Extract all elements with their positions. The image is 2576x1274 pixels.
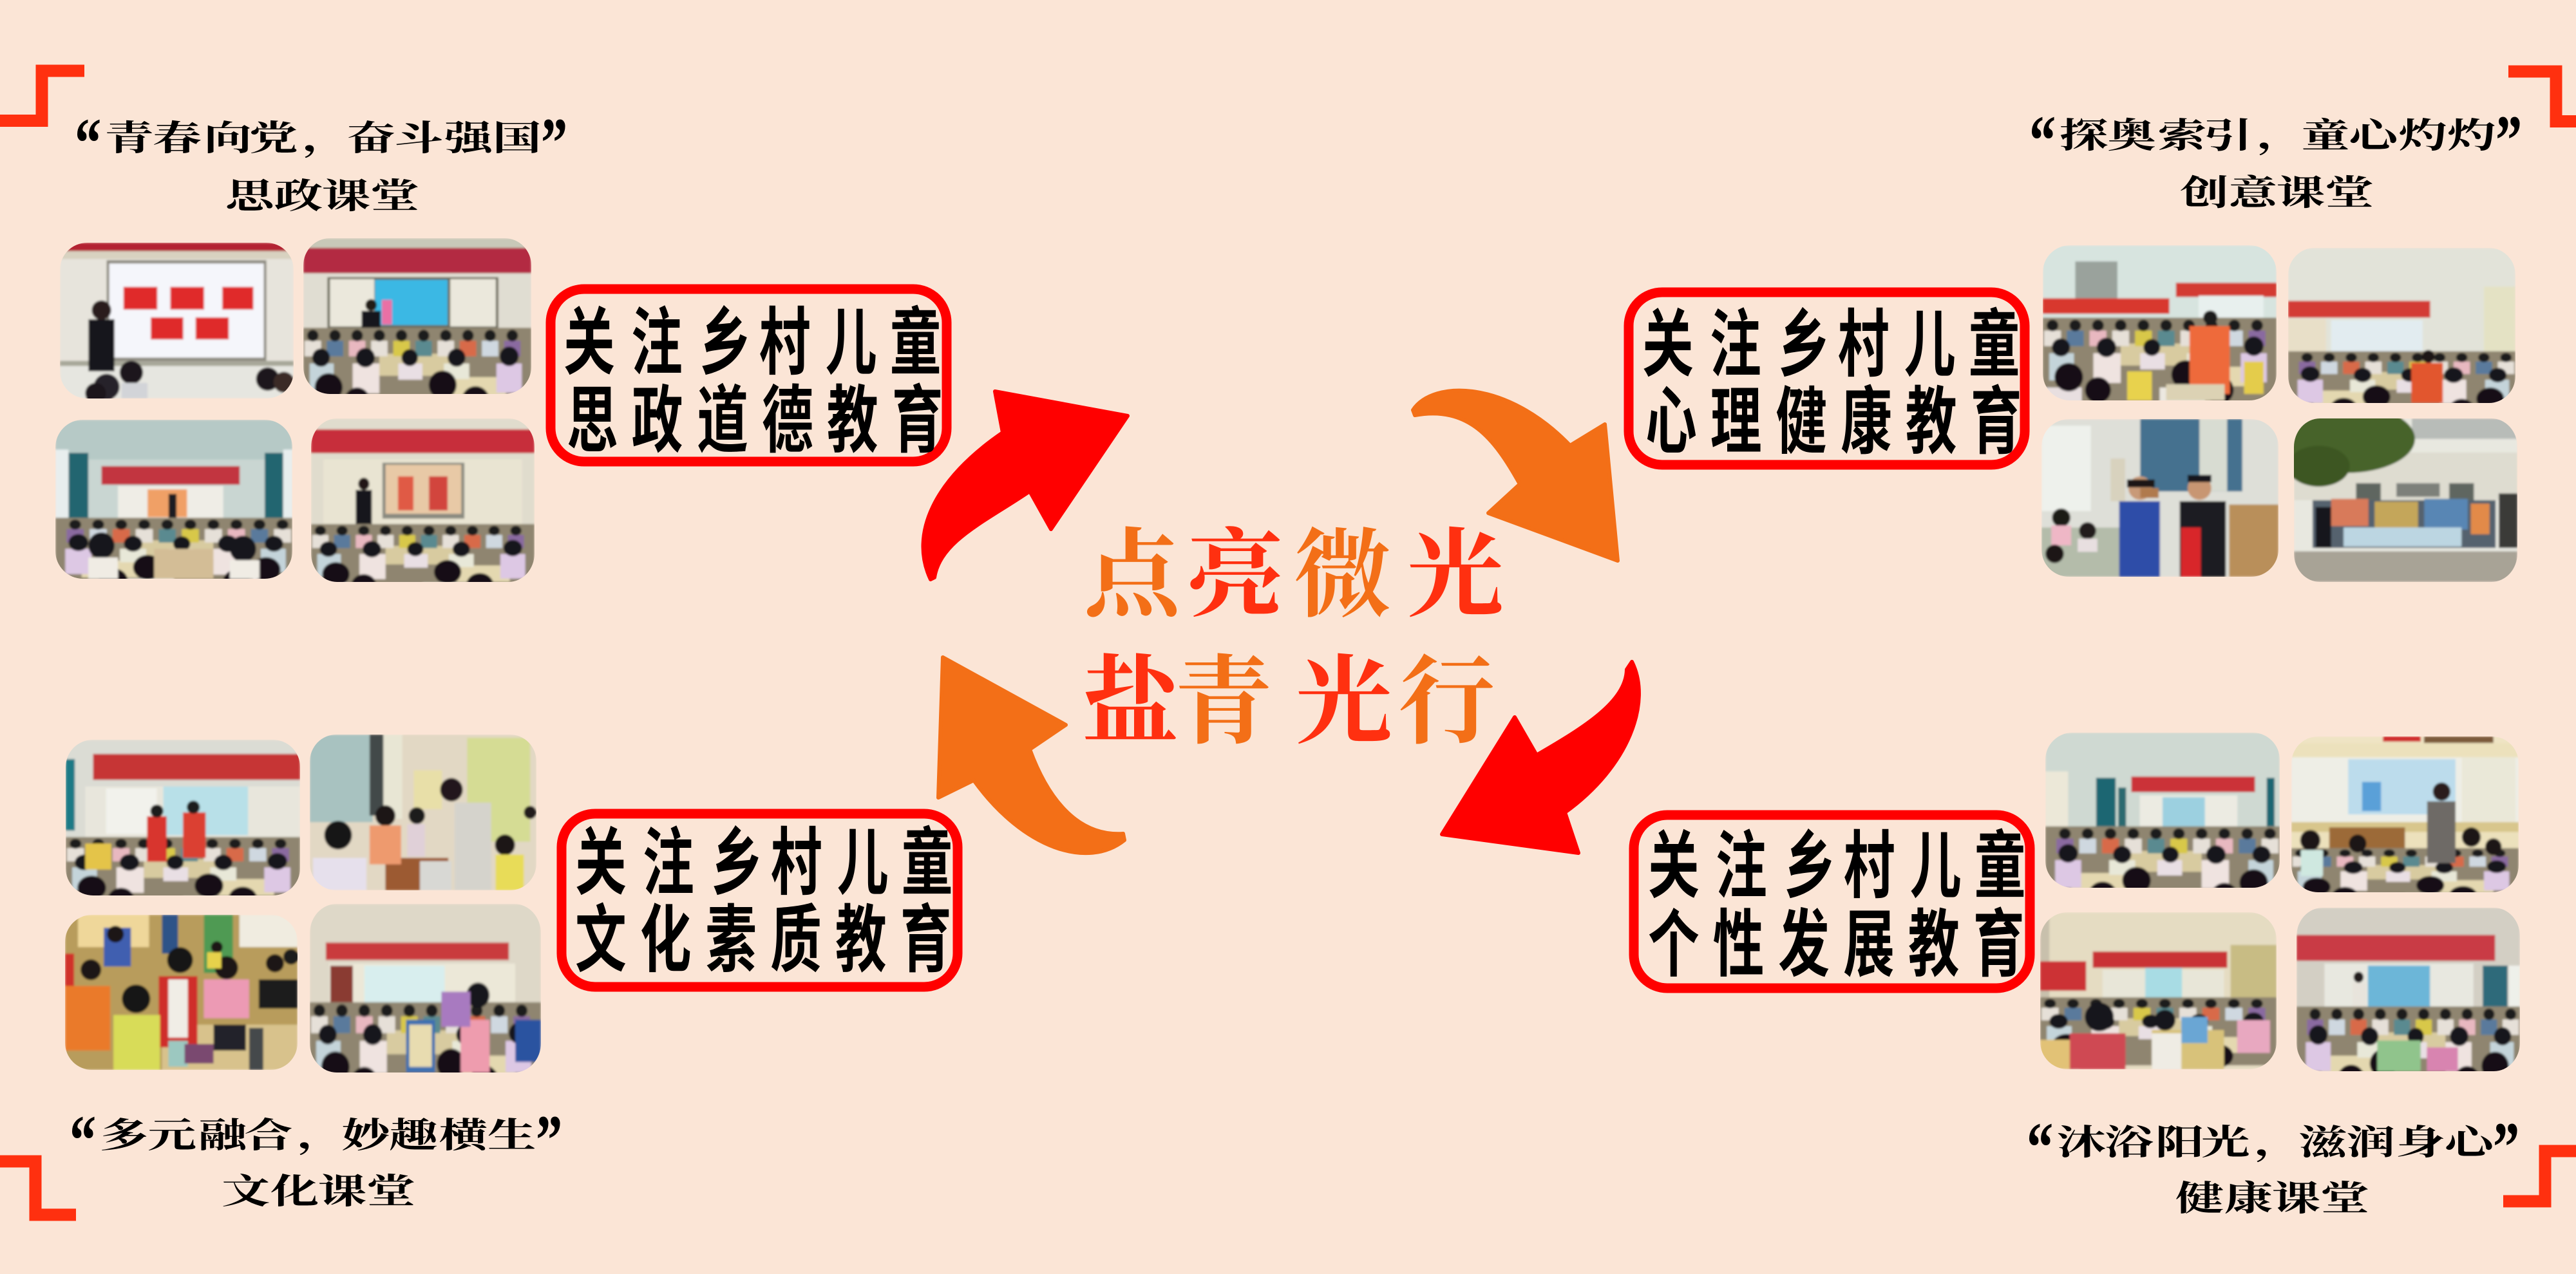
photo: teacher with flags on screen [60,243,294,398]
heading: bottom right quote: “ [2027,1109,2053,1187]
callout: top left: 关注乡村儿童 [564,302,942,384]
photo: classroom lesson with slide [2297,908,2520,1071]
arrow: orange bottom left [938,657,1124,853]
subheading: top left: 思政课堂 [225,168,419,218]
heading: top right quote [2029,102,2522,180]
subheading: bottom left: 文化课堂 [222,1163,415,1213]
heading: top right quote: “ [2029,102,2056,180]
callout: bottom left [562,814,958,987]
photo: classroom high ceiling [2288,248,2515,403]
photo: two volunteers in red vests [66,740,300,895]
heading: top left quote: ” [541,104,567,183]
heading: top left quote [75,104,567,183]
photo: boy in jersey with volunteer [2041,419,2278,577]
central title line 1: 光 [1407,497,1504,636]
heading: bottom right quote [2027,1109,2519,1187]
central title line 1: 微 [1294,497,1391,636]
corner bracket: top left [0,71,84,121]
photo: teacher among children [310,735,536,890]
subheading: top right: 创意课堂 [2180,165,2374,215]
central title line 2: 光 [1296,624,1392,763]
heading: bottom left quote: “ [70,1101,96,1180]
photo: classroom with curtains [2045,733,2280,888]
heading: bottom left quote: 多元融合，妙趣横生 [100,1107,536,1157]
photo: cartoon video on screen [311,418,535,582]
callout: top left: 思政道德教育 [567,380,943,462]
central title line 2: 青 [1175,624,1272,763]
photo: classroom with tables [2040,912,2277,1069]
callout: bottom left: 关注乡村儿童 [575,822,953,904]
heading: top left quote: 青春向党，奋斗强国 [105,110,542,160]
photo: wide classroom view [55,420,292,579]
callout: bottom right: 个性发展教育 [1648,904,2024,986]
central title line 2: 行 [1399,624,1495,763]
central title line 2: 盐 [1082,624,1183,763]
photo: colourful classroom group [65,915,298,1070]
callout: bottom right [1634,815,2030,988]
photo: group photo with banner [2294,418,2517,582]
callout: top right: 关注乡村儿童 [1642,304,2020,386]
photo: classroom with orange vest volunteer [2043,245,2277,400]
corner bracket: bottom right [2503,1151,2576,1201]
photo: teaching with blue screen [303,238,531,394]
heading: top right quote: 探奥索引，童心灼灼 [2060,108,2496,158]
photo: teacher with rabbit slide [2291,736,2519,892]
callout: bottom right: 关注乡村儿童 [1648,825,2026,907]
callout: top right: 心理健康教育 [1645,381,2022,463]
arrow: red top left [923,391,1128,579]
arrow: red bottom right [1442,662,1639,853]
heading: bottom right quote: ” [2493,1109,2519,1187]
subheading: bottom right: 健康课堂 [2175,1170,2369,1221]
arrow: orange top right [1413,391,1618,561]
callout: top right [1629,292,2025,465]
heading: top right quote: ” [2496,102,2522,180]
callout: top left [551,289,947,462]
central title line 1: 亮 [1187,497,1283,636]
corner bracket: top right [2508,71,2576,121]
heading: bottom right quote: 沐浴阳光，滋润身心 [2057,1114,2499,1165]
callout: bottom left: 文化素质教育 [575,899,951,981]
heading: bottom left quote [70,1101,562,1180]
photo: children raising hands [310,904,541,1073]
heading: bottom left quote: ” [536,1101,562,1180]
central title line 1: 点 [1084,497,1186,636]
corner bracket: bottom left [0,1161,76,1215]
heading: top left quote: “ [75,104,101,183]
